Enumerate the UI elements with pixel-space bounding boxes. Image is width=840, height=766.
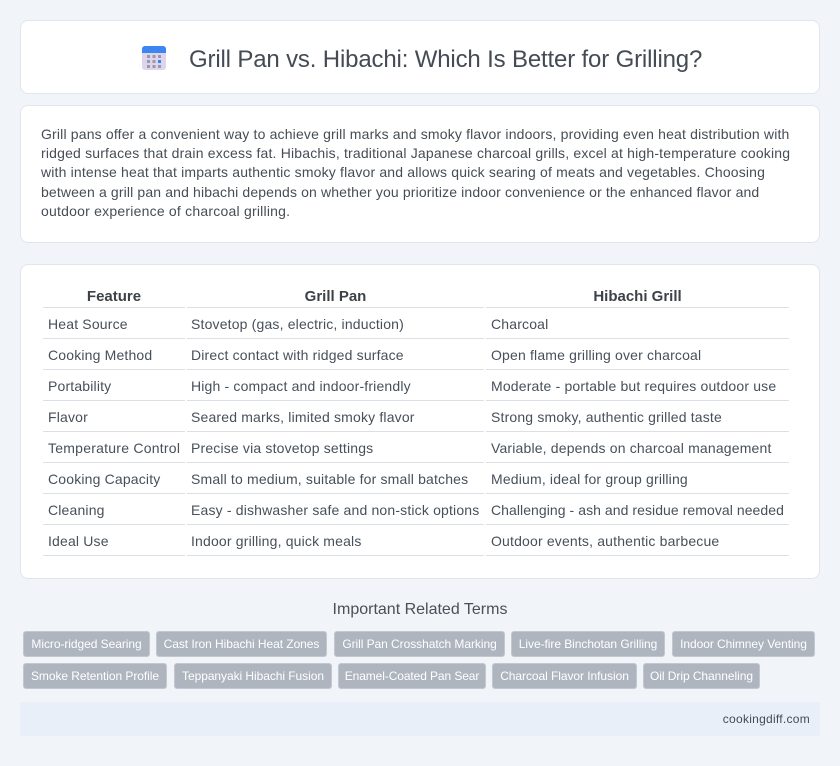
intro text: outdoor experience of charcoal grilling. — [41, 203, 290, 219]
related term tags: Micro-ridged Searing — [31, 637, 142, 651]
table rows: Easy - dishwasher safe and non-stick options — [191, 502, 479, 518]
intro text: between a grill pan and hibachi depends on whether you prioritize indoor convenience or the enhanced flavor and — [41, 184, 759, 200]
footer bar — [20, 702, 820, 736]
intro text: Grill pans offer a convenient way to achieve grill marks and smoky flavor indoors, providing even heat distribution with — [41, 126, 790, 142]
related term tags: Indoor Chimney Venting — [680, 637, 807, 651]
table rows: Outdoor events, authentic barbecue — [491, 533, 719, 549]
table rows: Cooking Capacity — [48, 471, 160, 487]
related term tags: Teppanyaki Hibachi Fusion — [182, 669, 324, 683]
table rows: High - compact and indoor-friendly — [191, 378, 411, 394]
table rows: Variable, depends on charcoal management — [491, 440, 772, 456]
header panel — [20, 20, 820, 94]
heading: related terms: Important Related Terms — [333, 601, 507, 618]
table rows: Medium, ideal for group grilling — [491, 471, 688, 487]
related term tags — [23, 631, 815, 689]
panel: comparison table — [20, 264, 820, 579]
table rows: Cleaning — [48, 502, 105, 518]
table rows: Portability — [48, 378, 111, 394]
table rows: Charcoal — [491, 316, 548, 332]
related term tags: Cast Iron Hibachi Heat Zones — [164, 637, 319, 651]
table header: Hibachi Grill — [593, 288, 682, 305]
table rows: Moderate - portable but requires outdoor use — [491, 378, 776, 394]
related term tags: Oil Drip Channeling — [650, 669, 753, 683]
table rows: Ideal Use — [48, 533, 109, 549]
table rows: Challenging - ash and residue removal needed — [491, 502, 784, 518]
table header — [87, 288, 682, 305]
table rows: Heat Source — [48, 316, 128, 332]
related term tags: Charcoal Flavor Infusion — [500, 669, 629, 683]
table rows — [43, 307, 789, 556]
table rows: Small to medium, suitable for small batches — [191, 471, 468, 487]
table rows: Seared marks, limited smoky flavor — [191, 409, 415, 425]
table rows: Open flame grilling over charcoal — [491, 347, 701, 363]
related term tags: Live-fire Binchotan Grilling — [519, 637, 657, 651]
table header: Feature — [87, 288, 141, 305]
icon: calendar — [142, 46, 166, 70]
table rows: Indoor grilling, quick meals — [191, 533, 362, 549]
table rows: Temperature Control — [48, 440, 180, 456]
panel: intro — [20, 105, 820, 243]
related term tags: Smoke Retention Profile — [31, 669, 159, 683]
intro text — [41, 126, 790, 219]
table header: Grill Pan — [305, 288, 366, 305]
table rows: Direct contact with ridged surface — [191, 347, 404, 363]
table rows: Stovetop (gas, electric, induction) — [191, 316, 404, 332]
intro text: ridged surfaces that drain excess fat. Hibachis, traditional Japanese charcoal grills, excel at high-temperature cooking — [41, 145, 790, 161]
table rows: Strong smoky, authentic grilled taste — [491, 409, 722, 425]
intro text: with intense heat that imparts authentic smoky flavor and allows quick searing of meats and vegetables. Choosing — [41, 164, 765, 180]
table rows: Flavor — [48, 409, 88, 425]
related term tags: Enamel-Coated Pan Sear — [345, 669, 479, 683]
footer credit: cookingdiff.com — [723, 712, 810, 726]
related term tags: Grill Pan Crosshatch Marking — [342, 637, 497, 651]
table rows: Precise via stovetop settings — [191, 440, 373, 456]
table rows: Cooking Method — [48, 347, 152, 363]
title: Grill Pan vs. Hibachi: Which Is Better for Grilling? — [189, 46, 702, 73]
